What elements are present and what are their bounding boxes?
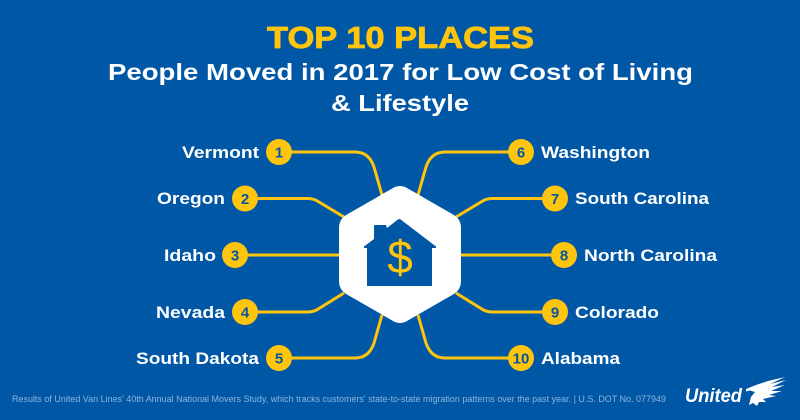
right item: South Carolina: 7 <box>551 191 559 208</box>
right item: South Carolina <box>542 186 710 212</box>
right item: Washington: Washington <box>541 143 650 162</box>
logo: United with eagle wing <box>685 377 786 407</box>
left item: Nevada: Nevada <box>156 303 226 322</box>
logo: United with eagle wing: United <box>685 386 742 407</box>
left item: Vermont <box>182 139 292 165</box>
left item: Idaho <box>164 242 248 268</box>
left item: Vermont: 1 <box>275 144 283 162</box>
right item: North Carolina <box>551 242 718 268</box>
icon: house <box>364 219 436 286</box>
title: & Lifestyle <box>331 90 469 116</box>
right item: North Carolina: North Carolina <box>584 246 718 265</box>
left item: Idaho: Idaho <box>164 246 216 265</box>
right item: Colorado: Colorado <box>575 303 659 322</box>
connector lines <box>235 152 564 358</box>
right item: North Carolina: 8 <box>560 248 568 264</box>
left item: Oregon: 2 <box>241 191 249 208</box>
left item: South Dakota: 5 <box>275 350 283 368</box>
title: TOP 10 PLACES <box>267 21 534 55</box>
left item: Nevada <box>156 299 258 325</box>
right item: Washington <box>508 139 650 165</box>
left item: Idaho: 3 <box>231 248 239 264</box>
left item: Vermont: Vermont <box>182 143 259 162</box>
right item: Colorado <box>542 299 659 325</box>
right item: Alabama: 10 <box>513 350 529 368</box>
left item: Oregon <box>157 186 258 212</box>
footnote: Results of United Van Lines' 40th Annual National Movers Study, which tracks customers' state-to-state migration patterns over the past year. | U.S. DOT No. 077949 <box>12 394 666 404</box>
right item: Colorado: 9 <box>551 304 559 322</box>
right item: Alabama <box>508 345 621 371</box>
right item: South Carolina: South Carolina <box>575 189 710 208</box>
right item: Alabama: Alabama <box>541 349 621 368</box>
left item: Oregon: Oregon <box>157 189 225 208</box>
central hexagon icon <box>339 186 461 323</box>
title: People Moved in 2017 for Low Cost of Living <box>108 59 693 85</box>
icon: dollar sign: $ <box>387 231 413 283</box>
right item: Washington: 6 <box>517 144 525 162</box>
title <box>108 21 693 116</box>
left item: South Dakota <box>136 345 292 371</box>
left item: South Dakota: South Dakota <box>136 349 260 368</box>
left item: Nevada: 4 <box>241 304 250 322</box>
